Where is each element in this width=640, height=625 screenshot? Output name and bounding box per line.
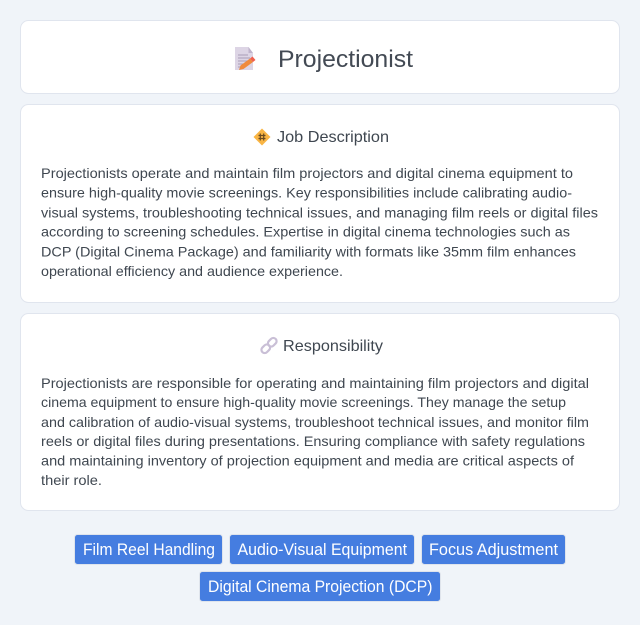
text block: job description: DCP (Digital Cinema Package) and familiarity with formats like 35mm film enhances <box>41 244 576 260</box>
tag: film reel handling: Film Reel Handling <box>83 541 215 559</box>
icon: diamond sign <box>254 128 270 146</box>
text block: job description: visual systems, troubleshooting technical issues, and managing film reels or digital files <box>41 204 598 220</box>
tag: audio-visual equipment <box>230 534 414 564</box>
icon: chain link <box>260 337 278 354</box>
text block: responsibility: and calibration of audio-visual systems, troubleshoot technical issues, and monitor film <box>41 414 589 430</box>
tag: focus adjustment <box>422 534 566 564</box>
icon: document with pencil <box>235 47 256 70</box>
text block: responsibility: Projectionists are responsible for operating and maintaining film projectors and digital <box>41 375 589 391</box>
tag: digital cinema projection: Digital Cinema Projection (DCP) <box>208 578 432 596</box>
panel: job description <box>20 104 620 302</box>
tag: film reel handling <box>74 534 222 564</box>
tag: audio-visual equipment: Audio-Visual Equipment <box>238 541 407 559</box>
tag: digital cinema projection <box>200 572 440 602</box>
text block: job description: operational efficiency and audience experience. <box>41 263 343 279</box>
panel: responsibility <box>20 314 620 510</box>
text block: job description: ensure high-quality movie screenings. Key responsibilities include calibrating audio- <box>41 184 572 200</box>
text block: responsibility: and maintaining inventory of projection equipment and media are critical aspects of <box>41 452 574 468</box>
heading: responsibility: Responsibility <box>283 338 383 355</box>
title: Projectionist <box>278 46 413 73</box>
text block: job description <box>41 165 598 279</box>
text block: responsibility: their role. <box>41 472 102 488</box>
tag: focus adjustment: Focus Adjustment <box>429 541 558 559</box>
header panel <box>20 20 620 94</box>
heading: job description: Job Description <box>277 129 389 146</box>
text block: responsibility <box>41 375 589 488</box>
text block: job description: Projectionists operate and maintain film projectors and digital cinema equipment to <box>41 165 573 181</box>
text block: responsibility: reels or digital files during presentations. Ensuring compliance with safety regulations <box>41 433 585 449</box>
text block: responsibility: cinema equipment to ensure high-quality movie screenings. They manage the setup <box>41 394 566 410</box>
text block: job description: according to screening schedules. Expertise in digital cinema technologies such as <box>41 224 570 240</box>
